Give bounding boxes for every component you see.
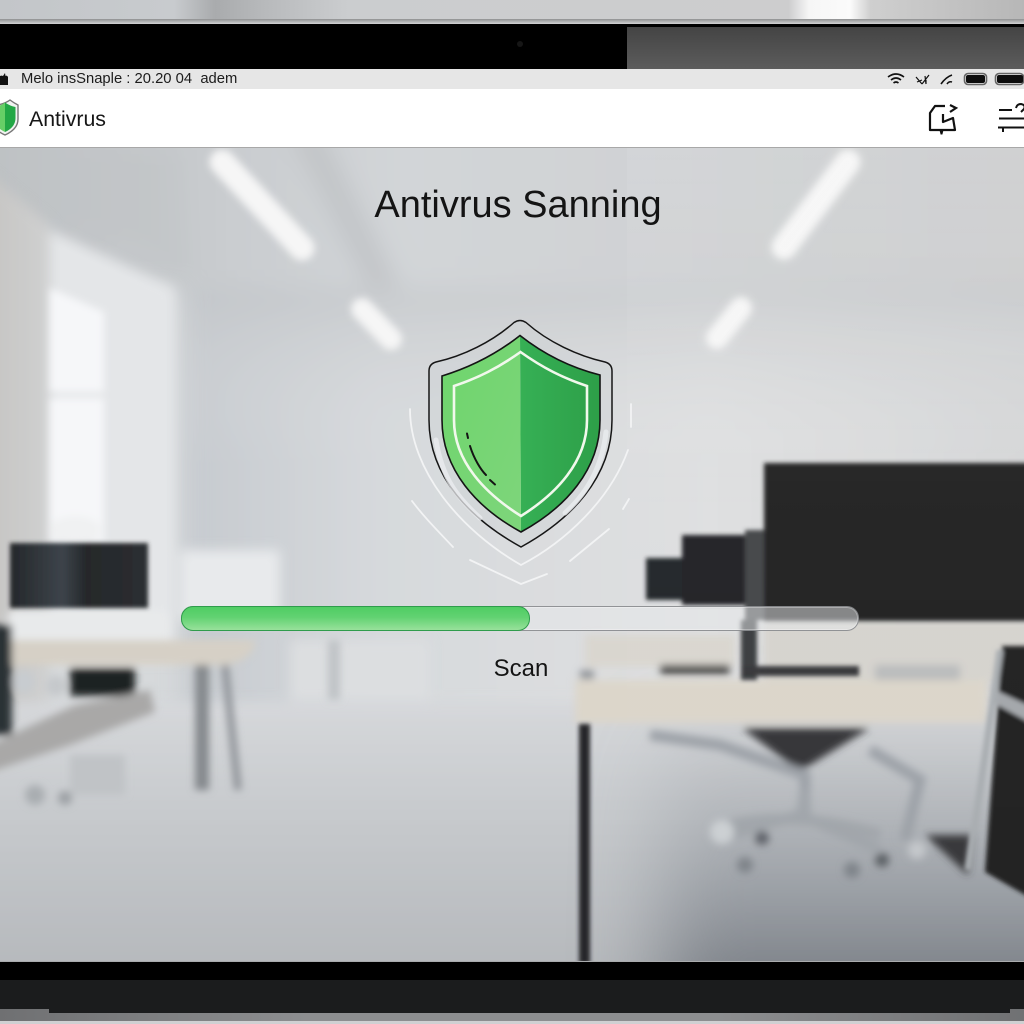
- progress fill: [181, 606, 530, 631]
- ceiling lights: [222, 162, 848, 339]
- title: Antivrus Sanning: [374, 184, 662, 226]
- right foreground chair: [925, 835, 972, 875]
- icon: clipboard arrow: [928, 104, 958, 134]
- right floor shade: [660, 730, 1024, 1024]
- left monitor: [10, 543, 148, 608]
- status bar icons: [0, 72, 1024, 86]
- right monitors: [646, 558, 684, 600]
- ceiling streak: [290, 130, 400, 290]
- laptop bezel top: [0, 0, 1024, 69]
- left wall: [0, 150, 50, 730]
- app header bar: [0, 89, 1024, 148]
- back wall: [183, 288, 1024, 718]
- background: blurred office: [0, 148, 1024, 962]
- icon: menu sliders: [998, 103, 1024, 132]
- progress bar: [181, 606, 859, 631]
- icon: small shield logo: [0, 99, 19, 136]
- floor: [0, 702, 1024, 1002]
- status bar: [0, 69, 1024, 89]
- left desk: [10, 640, 255, 665]
- laptop bezel bottom: [0, 961, 1024, 1024]
- window: [50, 288, 104, 542]
- glass reflection: [627, 148, 1024, 962]
- app name: Antivrus: [29, 107, 106, 131]
- right desks: [764, 621, 1024, 681]
- scan label: Scan: [494, 655, 548, 682]
- ceiling: [0, 110, 1024, 290]
- chair: [742, 728, 870, 768]
- left side white object: [180, 550, 280, 620]
- status bar text: Melo insSnaple : 20.20 04 adem: [21, 71, 237, 87]
- window reveal: [50, 230, 175, 660]
